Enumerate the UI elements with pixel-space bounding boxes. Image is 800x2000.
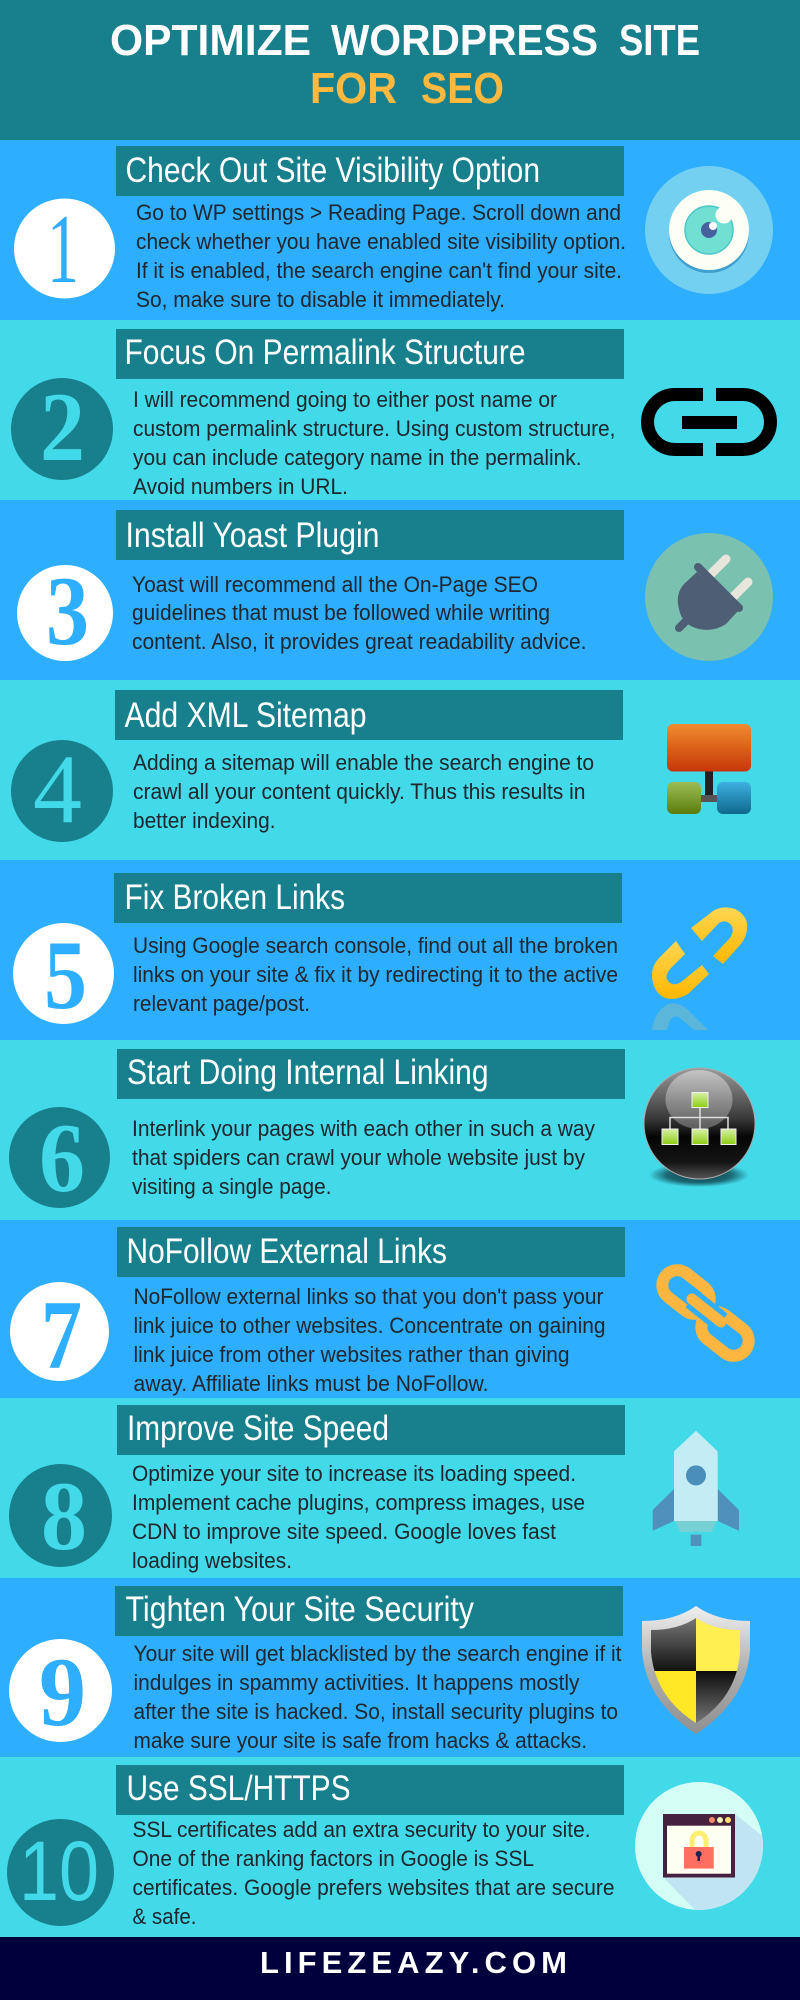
body text: step 6: visiting a single page. bbox=[132, 1174, 332, 1199]
body text: step 6: Interlink your pages with each other in such a way bbox=[132, 1116, 595, 1141]
icon: plug bbox=[645, 533, 773, 661]
body text: step 10: & safe. bbox=[132, 1904, 196, 1929]
body text: step 5: relevant page/post. bbox=[133, 991, 310, 1016]
title line 1 bbox=[110, 16, 700, 65]
title line 1: OPTIMIZE bbox=[110, 16, 311, 65]
icon: secure browser padlock bbox=[635, 1782, 770, 1915]
body text: step 9: after the site is hacked. So, install security plugins to bbox=[134, 1699, 618, 1724]
body text: step 1: check whether you have enabled site visibility option. bbox=[136, 229, 626, 254]
title line 2 bbox=[310, 64, 504, 113]
body text: step 5: links on your site & fix it by redirecting it to the active bbox=[133, 962, 618, 987]
number badge 6: 6 bbox=[39, 1104, 85, 1213]
body text: step 8 bbox=[132, 1461, 585, 1573]
body text: step 2: custom permalink structure. Using custom structure, bbox=[133, 416, 616, 441]
number badge 8: 8 bbox=[41, 1462, 87, 1571]
body text: step 7: link juice to other websites. Concentrate on gaining bbox=[134, 1313, 606, 1338]
title line 2: FOR bbox=[310, 64, 397, 113]
body text: step 1: Go to WP settings > Reading Page. Scroll down and bbox=[136, 200, 621, 225]
icon: eye bbox=[645, 166, 773, 294]
body text: step 9: make sure your site is safe from hacks & attacks. bbox=[134, 1728, 587, 1753]
body text: step 10: certificates. Google prefers websites that are secure bbox=[132, 1875, 614, 1900]
title line 1: SITE bbox=[619, 16, 700, 65]
body text: step 7 bbox=[134, 1284, 606, 1396]
body text: step 7: NoFollow external links so that you don't pass your bbox=[134, 1284, 604, 1309]
heading: step 1: Check Out Site Visibility Option bbox=[126, 151, 540, 190]
panel: step 1 site visibility bbox=[0, 140, 800, 320]
footer bbox=[0, 1937, 800, 2000]
heading: step 7 bbox=[117, 1227, 625, 1277]
panel: step 4 sitemap bbox=[0, 680, 800, 860]
body text: step 4: better indexing. bbox=[133, 808, 276, 833]
body text: step 10 bbox=[132, 1817, 614, 1929]
heading: step 2: Focus On Permalink Structure bbox=[124, 333, 526, 372]
title line 1: WORDPRESS bbox=[331, 16, 598, 65]
body text: step 1 bbox=[136, 200, 626, 312]
icon: rocket bbox=[653, 1431, 739, 1546]
body text: step 8: Implement cache plugins, compress images, use bbox=[132, 1490, 585, 1515]
number badge 9: 9 bbox=[39, 1638, 86, 1747]
header banner bbox=[0, 0, 800, 140]
body text: step 7: away. Affiliate links must be NoFollow. bbox=[134, 1371, 488, 1396]
panel: step 9 security bbox=[0, 1578, 800, 1757]
body text: step 4 bbox=[133, 750, 594, 833]
body text: step 8: loading websites. bbox=[132, 1548, 292, 1573]
footer brand text: LIFEZEAZY.COM bbox=[260, 1945, 567, 1980]
heading: step 4 bbox=[115, 690, 623, 740]
title line 2: SEO bbox=[421, 64, 504, 113]
body text: step 3 bbox=[132, 572, 586, 654]
number badge 7 bbox=[10, 1281, 109, 1390]
body text: step 1: So, make sure to disable it immediately. bbox=[136, 287, 505, 312]
body text: step 2: you can include category name in the permalink. bbox=[133, 445, 582, 470]
heading: step 5: Fix Broken Links bbox=[124, 878, 345, 917]
number badge 9 bbox=[9, 1638, 112, 1747]
heading: step 5 bbox=[114, 873, 622, 923]
heading: step 9: Tighten Your Site Security bbox=[126, 1590, 474, 1629]
icon: sitemap bbox=[667, 724, 751, 814]
number badge 3: 3 bbox=[46, 557, 89, 666]
icon: broken yellow link bbox=[652, 907, 747, 1030]
number badge 2: 2 bbox=[40, 373, 85, 482]
number badge 4: 4 bbox=[33, 735, 82, 844]
heading: step 3: Install Yoast Plugin bbox=[126, 516, 380, 555]
heading: step 10: Use SSL/HTTPS bbox=[126, 1769, 350, 1808]
body text: step 10: SSL certificates add an extra security to your site. bbox=[132, 1817, 590, 1842]
body text: step 8: Optimize your site to increase its loading speed. bbox=[132, 1461, 576, 1486]
body text: step 7: link juice from other websites rather than giving bbox=[134, 1342, 570, 1367]
icon: orange chain bbox=[656, 1264, 755, 1362]
number badge 1 bbox=[14, 195, 115, 304]
body text: step 4: Adding a sitemap will enable the search engine to bbox=[133, 750, 594, 775]
body text: step 3: Yoast will recommend all the On-Page SEO bbox=[132, 572, 538, 597]
body text: step 5 bbox=[133, 933, 618, 1016]
heading: step 3 bbox=[116, 510, 624, 560]
heading: step 8 bbox=[117, 1405, 625, 1455]
body text: step 9: Your site will get blacklisted by the search engine if it bbox=[134, 1641, 622, 1666]
number badge 2 bbox=[11, 373, 113, 482]
number badge 4 bbox=[11, 735, 113, 844]
heading: step 4: Add XML Sitemap bbox=[124, 696, 366, 735]
heading: step 6: Start Doing Internal Linking bbox=[127, 1053, 488, 1092]
body text: step 2: Avoid numbers in URL. bbox=[133, 474, 348, 499]
number badge 10: 10 bbox=[19, 1824, 99, 1918]
heading: step 6 bbox=[117, 1049, 625, 1099]
icon: glossy network sphere bbox=[644, 1068, 755, 1187]
icon: shield bbox=[642, 1606, 750, 1734]
number badge 6 bbox=[9, 1104, 110, 1213]
body text: step 6: that spiders can crawl your whole website just by bbox=[132, 1145, 585, 1170]
panel: step 8 site speed bbox=[0, 1398, 800, 1578]
body text: step 8: CDN to improve site speed. Google loves fast bbox=[132, 1519, 556, 1544]
body text: step 6 bbox=[132, 1116, 595, 1199]
number badge 7: 7 bbox=[41, 1281, 82, 1390]
panel: step 7 nofollow bbox=[0, 1220, 800, 1398]
number badge 5: 5 bbox=[44, 921, 87, 1030]
body text: step 10: One of the ranking factors in Google is SSL bbox=[132, 1846, 534, 1871]
number badge 5 bbox=[13, 921, 114, 1030]
heading: step 10 bbox=[116, 1765, 624, 1815]
panel: step 10 ssl bbox=[0, 1757, 800, 1937]
icon: black link bbox=[648, 394, 770, 450]
body text: step 9: indulges in spammy activities. It happens mostly bbox=[134, 1670, 580, 1695]
heading: step 8: Improve Site Speed bbox=[127, 1409, 389, 1448]
body text: step 9 bbox=[134, 1641, 622, 1753]
number badge 1: 1 bbox=[47, 195, 79, 304]
heading: step 9 bbox=[115, 1586, 623, 1636]
body text: step 3: content. Also, it provides great readability advice. bbox=[132, 629, 586, 654]
body text: step 2 bbox=[133, 387, 616, 499]
body text: step 1: If it is enabled, the search engine can't find your site. bbox=[136, 258, 622, 283]
body text: step 3: guidelines that must be followed while writing bbox=[132, 600, 550, 625]
panel: step 6 internal linking bbox=[0, 1040, 800, 1220]
heading: step 7: NoFollow External Links bbox=[126, 1232, 447, 1271]
body text: step 5: Using Google search console, find out all the broken bbox=[133, 933, 618, 958]
panel: step 3 yoast bbox=[0, 500, 800, 680]
body text: step 4: crawl all your content quickly. Thus this results in bbox=[133, 779, 586, 804]
panel: step 5 broken links bbox=[0, 860, 800, 1040]
number badge 3 bbox=[17, 557, 113, 666]
number badge 8 bbox=[9, 1462, 112, 1571]
body text: step 2: I will recommend going to either post name or bbox=[133, 387, 557, 412]
panel: step 2 permalink bbox=[0, 320, 800, 500]
